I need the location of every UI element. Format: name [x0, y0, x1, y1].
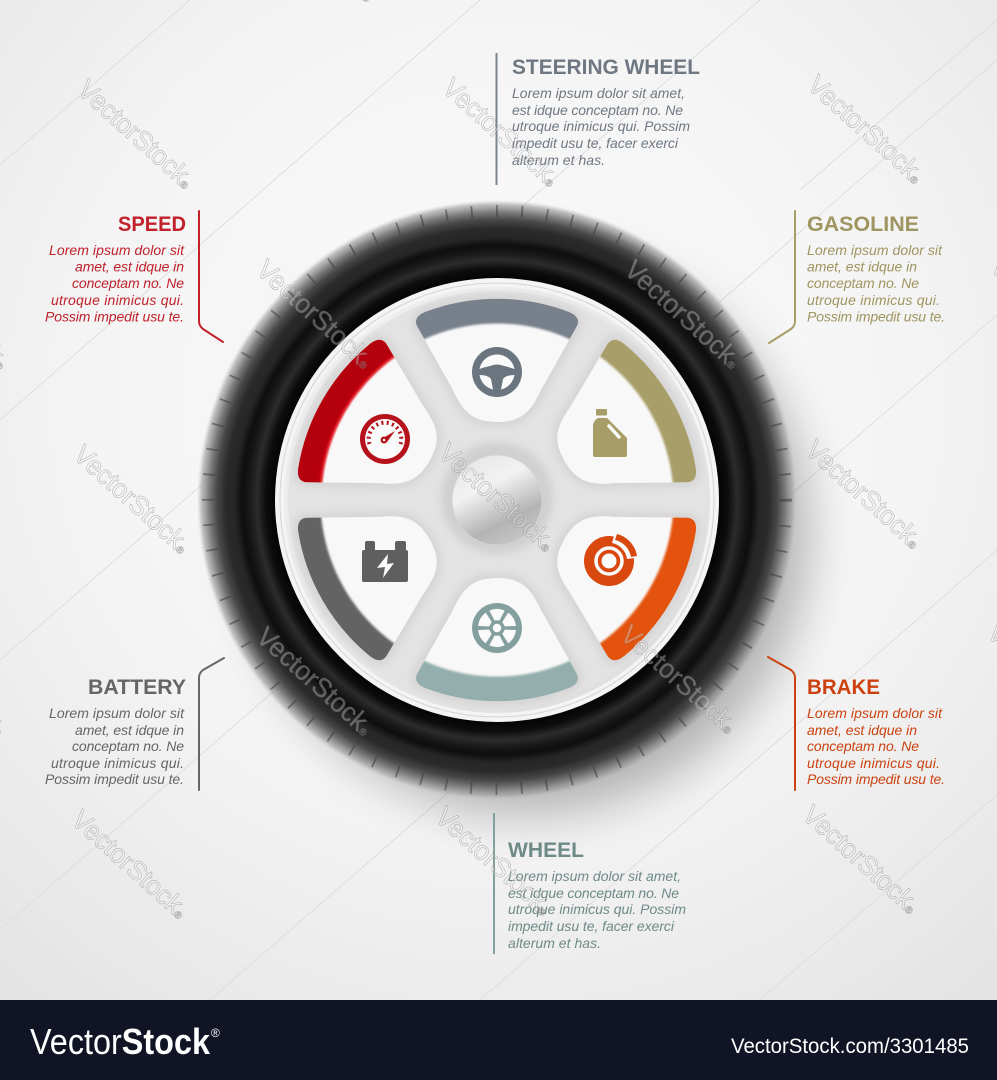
- panel: gasoline: amet, est idque in: [807, 258, 917, 274]
- panel: brake: Lorem ipsum dolor sit: [807, 705, 943, 721]
- hub: [441, 442, 553, 554]
- panel: wheel: impedit usu te, facer exerci: [508, 918, 675, 934]
- panel: steering wheel: Lorem ipsum dolor sit amet,: [512, 85, 685, 101]
- panel: speed: amet, est idque in: [75, 258, 184, 274]
- panel: speed: utroque inimicus qui.: [51, 292, 184, 308]
- panel: speed: [45, 211, 223, 342]
- segment: speed: [298, 340, 437, 484]
- watermarks: VectorStock®: [619, 254, 748, 375]
- panel: wheel: est idque conceptam no. Ne: [508, 885, 679, 901]
- panel: battery: BATTERY: [88, 676, 186, 699]
- panel: gasoline: Lorem ipsum dolor sit: [807, 242, 943, 258]
- panel: wheel: alterum et has.: [508, 935, 601, 951]
- icon: brake disc: [584, 534, 637, 586]
- icon: alloy wheel: [472, 603, 522, 653]
- panel: battery: Lorem ipsum dolor sit: [49, 705, 185, 721]
- panel: brake: utroque inimicus qui.: [807, 755, 940, 771]
- panel: battery: Possim impedit usu te.: [45, 771, 184, 787]
- watermarks: VectorStock®: [66, 804, 195, 925]
- panel: steering wheel: impedit usu te, facer exerci: [512, 135, 679, 151]
- tire: [197, 200, 797, 800]
- panel: gasoline: utroque inimicus qui.: [807, 292, 940, 308]
- watermarks: VectorStock®: [430, 801, 559, 922]
- watermarks: VectorStock®: [68, 439, 197, 560]
- segment: gasoline: [557, 340, 696, 484]
- footer bar: [0, 1000, 997, 1080]
- panel: battery: utroque inimicus qui.: [51, 755, 184, 771]
- icon: battery: [362, 541, 408, 582]
- panel: battery: conceptam no. Ne: [72, 738, 184, 754]
- panel: gasoline: GASOLINE: [807, 213, 919, 236]
- segment: steering wheel: [416, 298, 578, 422]
- panel: battery: [45, 658, 224, 790]
- panel: gasoline: [769, 211, 945, 343]
- panel: steering wheel: est idque conceptam no. Ne: [512, 102, 683, 118]
- icon: fuel canister: [593, 409, 627, 457]
- icon: steering wheel: [472, 347, 522, 397]
- watermarks: VectorStock®: [800, 434, 929, 555]
- panel: steering wheel: [496, 53, 700, 185]
- panel: steering wheel: STEERING WHEEL: [512, 56, 700, 79]
- spoke bevels: [282, 299, 712, 701]
- panel: gasoline: conceptam no. Ne: [807, 275, 919, 291]
- panel: brake: Possim impedit usu te.: [807, 771, 945, 787]
- segment: battery: [298, 516, 437, 660]
- watermarks: VectorStock®: [802, 69, 931, 190]
- panel: wheel: WHEEL: [508, 839, 584, 862]
- footer url: VectorStock.com/3301485: [731, 1035, 969, 1058]
- wheel shadow: [244, 250, 808, 814]
- panel: speed: Possim impedit usu te.: [45, 308, 184, 324]
- panel: brake: BRAKE: [807, 676, 880, 699]
- panel: speed: SPEED: [118, 213, 186, 236]
- registered mark: ®: [211, 1026, 220, 1040]
- rim: [275, 278, 719, 722]
- icon: speedometer: [360, 414, 410, 464]
- watermarks: VectorStock®: [72, 74, 201, 195]
- watermarks: VectorStock®: [615, 619, 744, 740]
- segment: wheel: [416, 578, 578, 702]
- panel: steering wheel: utroque inimicus qui. Possim: [512, 118, 690, 134]
- panel: wheel: [494, 813, 686, 954]
- panel: speed: Lorem ipsum dolor sit: [49, 242, 185, 258]
- watermarks: VectorStock®: [433, 437, 562, 558]
- watermarks: VectorStock®: [797, 799, 926, 920]
- panel: steering wheel: alterum et has.: [512, 152, 605, 168]
- panel: speed: conceptam no. Ne: [72, 275, 184, 291]
- panel: gasoline: Possim impedit usu te.: [807, 308, 945, 324]
- panel: brake: [768, 657, 945, 790]
- segment: brake: [557, 516, 696, 660]
- panel: wheel: Lorem ipsum dolor sit amet,: [508, 868, 681, 884]
- panel: battery: amet, est idque in: [75, 722, 184, 738]
- footer logo: VectorStock: [30, 1021, 211, 1062]
- panel: brake: amet, est idque in: [807, 722, 917, 738]
- panel: wheel: utroque inimicus qui. Possim: [508, 901, 686, 917]
- watermarks: VectorStock®: [251, 254, 380, 375]
- panel: brake: conceptam no. Ne: [807, 738, 919, 754]
- watermarks: VectorStock®: [437, 72, 566, 193]
- watermarks: VectorStock®: [251, 621, 380, 742]
- wheel: [197, 200, 808, 814]
